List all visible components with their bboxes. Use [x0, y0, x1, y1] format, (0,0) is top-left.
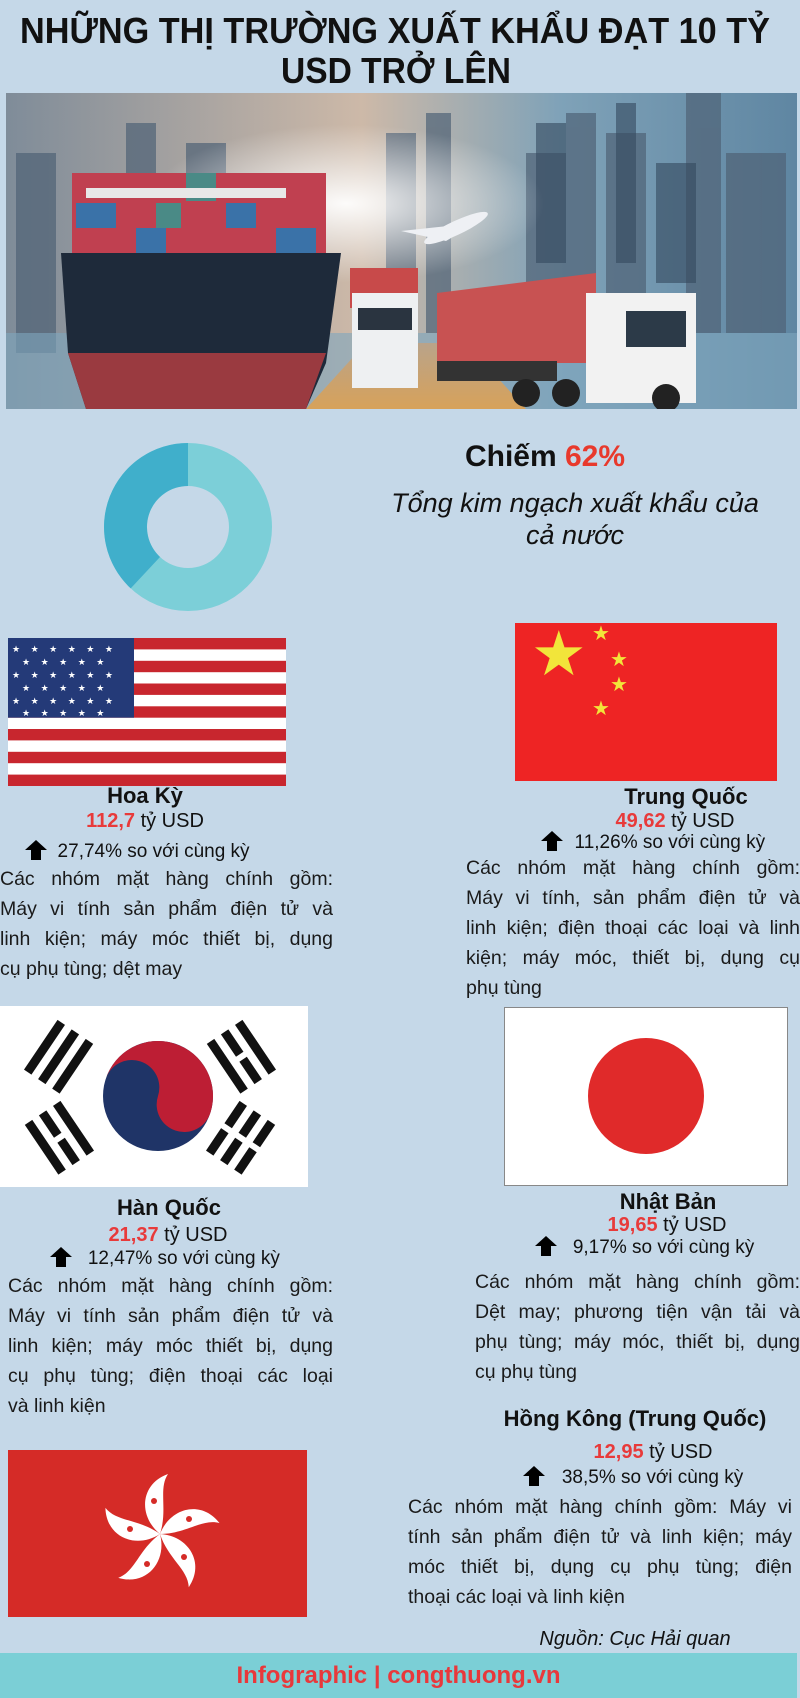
flag: USA: ★★★★★★ [12, 645, 123, 655]
growth with arrow icon: 38,5% so với cùng kỳ [562, 1467, 743, 1488]
flag: USA: ★★★★★ [22, 684, 115, 694]
ship [72, 173, 326, 253]
product description [8, 1275, 333, 1417]
product description [466, 857, 800, 999]
value: 21,37 tỷ USD [109, 1224, 227, 1246]
product description: và linh kiện [8, 1395, 106, 1417]
product description: móc thiết bị, dụng cụ phụ tùng; điện [408, 1556, 792, 1578]
subtitle text: Tổng kim ngạch xuất khẩu của [391, 488, 759, 518]
product description: Các nhóm mặt hàng chính gồm: [0, 868, 333, 890]
flag: Hong Kong [8, 1450, 307, 1617]
panel: Trung Quốc [466, 623, 800, 999]
flag: China [515, 623, 777, 781]
growth with arrow icon: 12,47% so với cùng kỳ [88, 1248, 280, 1269]
value: 19,65 tỷ USD [608, 1214, 726, 1236]
product description: phụ tùng; máy móc, thiết bị, dụng [475, 1331, 800, 1353]
product description: Dệt may; phương tiện vận tải và [475, 1301, 800, 1323]
growth with arrow icon: 27,74% so với cùng kỳ [58, 841, 250, 862]
flag: China: ★ [610, 672, 628, 696]
big truck [437, 273, 596, 363]
country name: Trung Quốc [624, 784, 748, 809]
panel: Nhật Bản [475, 1007, 800, 1383]
product description [475, 1271, 800, 1383]
flag: USA: ★★★★★ [22, 658, 115, 668]
source note: Nguồn: Cục Hải quan [539, 1628, 731, 1650]
flag: USA [8, 638, 286, 786]
subtitle text: cả nước [526, 520, 624, 550]
product description: cụ phụ tùng [475, 1361, 577, 1383]
product description: linh kiện; máy móc thiết bị, dụng [8, 1335, 333, 1357]
plane [401, 207, 491, 249]
product description: Máy vi tính sản phẩm điện tử và [8, 1305, 333, 1327]
flag: Japan [504, 1007, 788, 1186]
product description: cụ phụ tùng; dệt may [0, 958, 182, 980]
title: USD TRỞ LÊN [281, 49, 511, 91]
flag: USA: ★★★★★★ [12, 671, 123, 681]
panel: Hoa Kỳ [0, 638, 333, 980]
donut chart 62% [104, 443, 272, 611]
product description: cụ phụ tùng; điện thoại các loại [8, 1365, 333, 1387]
product description: Các nhóm mặt hàng chính gồm: Máy vi [408, 1496, 792, 1518]
growth with arrow icon: 11,26% so với cùng kỳ [575, 832, 765, 853]
subtitle text [391, 488, 759, 550]
product description: Các nhóm mặt hàng chính gồm: [475, 1271, 800, 1293]
country name: Hoa Kỳ [107, 783, 183, 808]
product description [0, 868, 333, 980]
product description: kiện; máy móc, thiết bị, dụng cụ [466, 947, 800, 969]
product description: linh kiện; điện thoại các loại và linh [466, 917, 800, 939]
title [20, 9, 770, 91]
value: 12,95 tỷ USD [594, 1441, 712, 1463]
hero photo: ship, trucks, plane, city [6, 93, 797, 409]
flag: China: ★ [592, 696, 610, 720]
product description: Máy vi tính, sản phẩm điện tử và [466, 887, 800, 909]
value: 112,7 tỷ USD [86, 810, 204, 832]
panel: Hàn Quốc [0, 1006, 333, 1417]
panel: Hồng Kông [408, 1406, 792, 1608]
footer banner [0, 1653, 797, 1698]
flag: USA: ★★★★★★ [12, 697, 123, 707]
small truck [350, 268, 418, 308]
headline: Chiếm 62%: Chiếm 62% [465, 440, 625, 473]
product description: Các nhóm mặt hàng chính gồm: [8, 1275, 333, 1297]
country name: Hàn Quốc [117, 1195, 221, 1220]
flag: USA: ★★★★★ [22, 709, 115, 719]
product description: thoại các loại và linh kiện [408, 1586, 625, 1608]
product description: Các nhóm mặt hàng chính gồm: [466, 857, 800, 879]
footer banner: Infographic | congthuong.vn [236, 1662, 560, 1689]
title: NHỮNG THỊ TRƯỜNG XUẤT KHẨU ĐẠT 10 TỶ [20, 9, 770, 51]
value: 49,62 tỷ USD [616, 810, 734, 832]
product description: Máy vi tính sản phẩm điện tử và [0, 898, 333, 920]
flag: China: ★ [610, 647, 628, 671]
product description: linh kiện; máy móc thiết bị, dụng [0, 928, 333, 950]
product description: tính sản phẩm điện tử và linh kiện; máy [408, 1526, 792, 1548]
country name: Hồng Kông (Trung Quốc) [504, 1406, 766, 1431]
product description: phụ tùng [466, 977, 542, 999]
growth with arrow icon: 9,17% so với cùng kỳ [573, 1237, 754, 1258]
product description [408, 1496, 792, 1608]
flag: Korea [0, 1006, 308, 1187]
country name: Nhật Bản [620, 1189, 716, 1214]
